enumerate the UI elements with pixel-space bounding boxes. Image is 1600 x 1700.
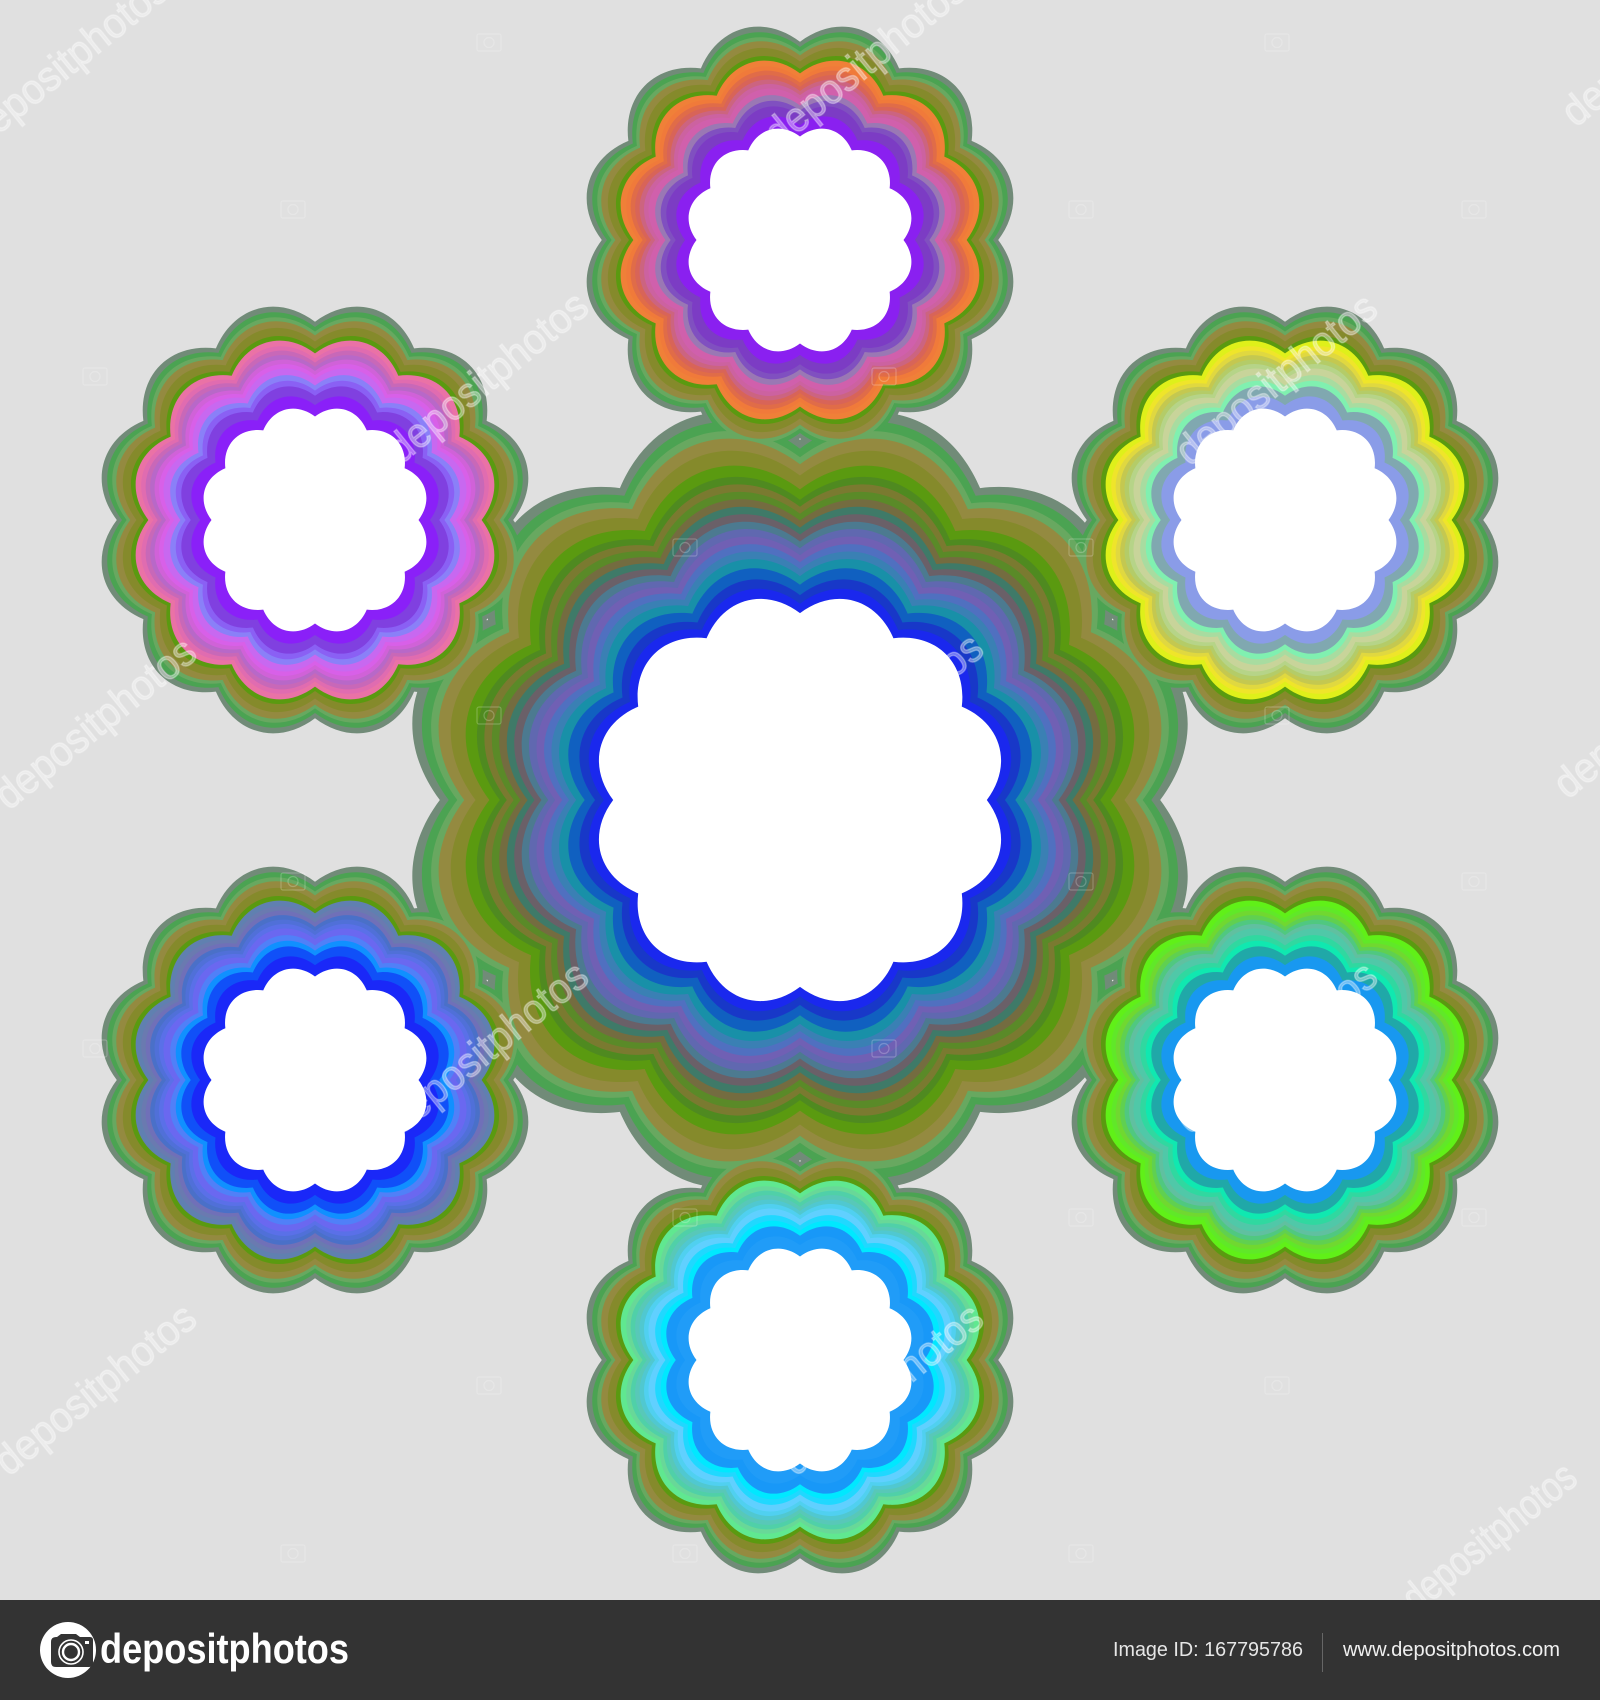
footer bar [0, 1600, 1600, 1700]
icon: camera logo [40, 1622, 96, 1678]
green ring shared by all flowers [107, 32, 1493, 1568]
diagonal watermark text: depositphotos [1166, 951, 1386, 1142]
flower: upper right, yellow and mint [1106, 341, 1464, 699]
deep green ring shared by all flowers [131, 56, 1469, 1544]
flower: lower left, blue [136, 901, 494, 1259]
central flower: blue rings with white centre [477, 477, 1123, 1123]
diagonal watermark text: depositphotos [1166, 283, 1386, 474]
outer grey ring shared by all flowers [102, 27, 1498, 1573]
logo wordmark: depositphotos [100, 1625, 349, 1672]
flower: lower right, green and teal [1106, 901, 1464, 1259]
website url: www.depositphotos.com [1342, 1639, 1560, 1661]
diagonal watermark text: depositphotos [772, 623, 992, 814]
flower: bottom, cyan [621, 1181, 979, 1539]
watermark camera icons [83, 34, 1486, 1562]
tan ring shared by all flowers [116, 41, 1484, 1559]
diagonal watermark text: depositphotos [772, 1293, 992, 1484]
flower: top, orange and purple [621, 61, 979, 419]
diagonal watermark text: depositphotos [377, 951, 597, 1142]
light green ring shared by all flowers [112, 37, 1488, 1563]
image id: Image ID: 167795786 [1113, 1639, 1303, 1661]
diagonal watermark text: depositphotos [377, 281, 597, 472]
flower: upper left, pink and violet [136, 341, 494, 699]
olive ring shared by all flowers [123, 48, 1477, 1552]
